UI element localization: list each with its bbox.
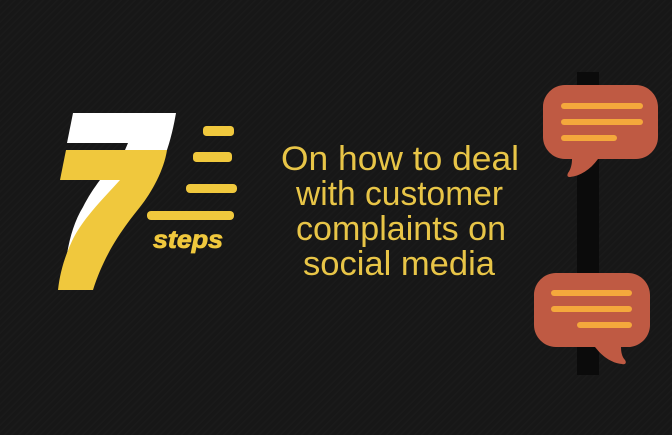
speed bar 1: [203, 126, 234, 136]
speed bar 3: [186, 184, 237, 193]
numeral 7: white shadow: [67, 113, 176, 254]
heading text: [281, 140, 519, 283]
numeral 7: yellow front: [58, 150, 167, 290]
bubble text lines: [551, 290, 632, 328]
heading text: complaints on: [296, 210, 506, 248]
bubble body: [534, 273, 650, 364]
speed bar 4: [147, 211, 234, 220]
heading text: with customer: [295, 175, 503, 213]
heading text: On how to deal: [281, 140, 519, 178]
speech bubble: bottom: [534, 273, 650, 364]
heading text: social media: [303, 245, 495, 283]
speed bar 2: [193, 152, 232, 162]
bubble body: [543, 85, 658, 177]
vertical connector bar: [577, 72, 599, 375]
speech bubble: top: [543, 85, 658, 177]
logo: 7 steps: [58, 113, 237, 290]
steps label: steps: [153, 226, 223, 254]
bubble text lines: [561, 103, 643, 141]
